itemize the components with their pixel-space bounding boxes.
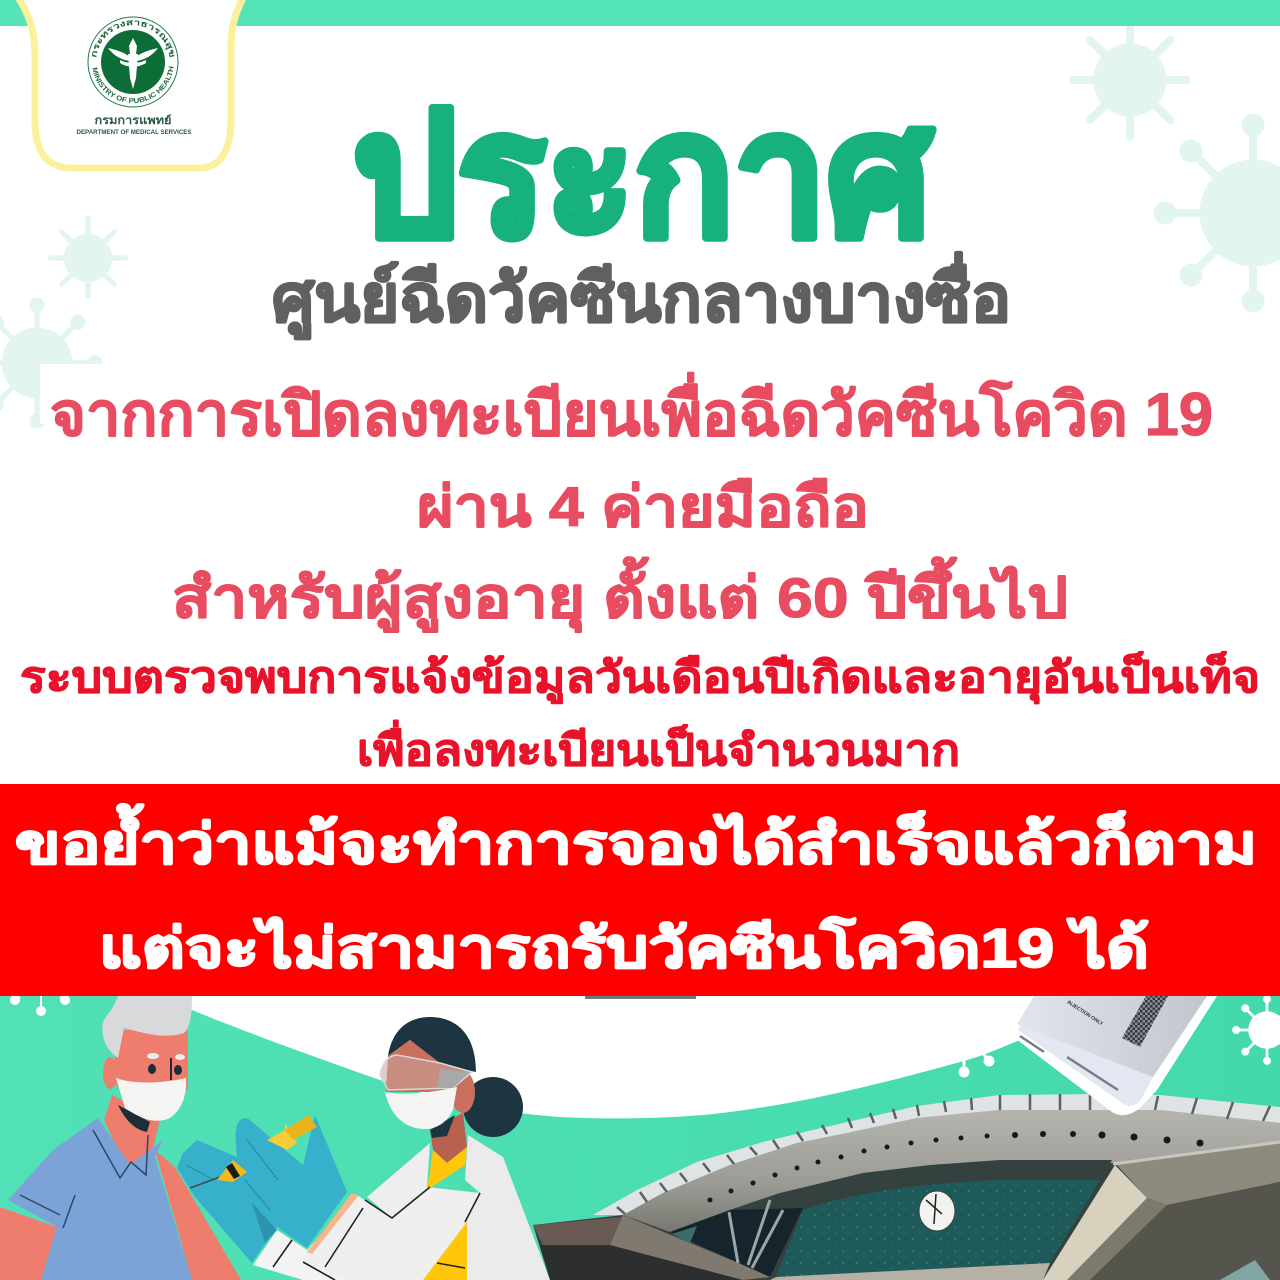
right inner dark wall xyxy=(1090,1182,1280,1280)
skylight dividers xyxy=(617,1094,1270,1214)
neck xyxy=(104,1095,160,1165)
seal ring text bottom: MINISTRY OF PUBLIC HEALTH xyxy=(92,66,174,103)
vial QR code xyxy=(1122,996,1168,1047)
dark struts xyxy=(670,1208,803,1277)
icon: white virus spokes left xyxy=(11,996,69,1015)
icon: faint virus clipped left xyxy=(0,298,102,428)
glove xyxy=(177,1115,347,1263)
syringe xyxy=(190,1115,317,1188)
left block brown xyxy=(533,1217,623,1245)
lower yellow shirt xyxy=(423,1222,467,1280)
text line 2: ผ่าน 4 ค่ายมือถือ xyxy=(417,475,869,538)
vaccine vial xyxy=(1015,996,1217,1115)
red banner xyxy=(0,784,1280,996)
bun xyxy=(463,1077,523,1137)
icon: white virus right xyxy=(1232,995,1280,1065)
coat sleeve xyxy=(305,1187,480,1280)
icon: caduceus xyxy=(108,38,158,89)
title: ประกาศ xyxy=(353,80,934,272)
neck xyxy=(430,1113,467,1163)
mask xyxy=(385,1087,457,1129)
character: nurse xyxy=(177,1017,550,1280)
icon: faint virus right xyxy=(1154,114,1280,312)
top green band xyxy=(0,0,1280,26)
diagonal beam xyxy=(610,1215,772,1280)
fascia holes xyxy=(708,1131,1204,1202)
logo panel xyxy=(17,0,244,168)
arm left xyxy=(0,1207,57,1280)
goggles xyxy=(380,1055,472,1090)
photo: bang sue station xyxy=(533,1094,1280,1280)
beige panel xyxy=(1043,1165,1147,1280)
hair xyxy=(102,996,192,1058)
bottom illustration xyxy=(0,995,1280,1280)
logo: ministry seal xyxy=(88,16,178,108)
banner line 2: แต่จะไม่สามารถรับวัคซีนโควิด19 ได้ xyxy=(99,916,1149,979)
dark soffit band xyxy=(730,1160,1112,1225)
yellow shirt xyxy=(427,1147,467,1190)
face xyxy=(112,1030,188,1095)
right ledge wall xyxy=(1115,1142,1280,1205)
character: elderly man xyxy=(0,996,241,1280)
bottom right glass xyxy=(1220,1260,1270,1280)
hair cap xyxy=(388,1017,476,1072)
building base xyxy=(533,1123,1280,1280)
shirt xyxy=(8,1118,192,1280)
vial label text: INJECTION ONLY xyxy=(1066,1000,1105,1028)
eyes xyxy=(148,1058,182,1080)
teal glass window xyxy=(776,1180,1100,1277)
text line 3: สำหรับผู้สูงอายุ ตั้งแต่ 60 ปีขึ้นไป xyxy=(172,557,1068,633)
text line 1: จากการเปิดลงทะเบียนเพื่อฉีดวัคซีนโควิด 19 xyxy=(50,372,1213,448)
text line 5: เพื่อลงทะเบียนเป็นจำนวนมาก xyxy=(357,720,960,775)
coat right xyxy=(420,1135,550,1280)
white curved swoosh xyxy=(160,996,1060,1118)
mask xyxy=(116,1078,186,1121)
arm right xyxy=(155,1150,241,1280)
banner line 1: ขอย้ำว่าแม้จะทำการจองได้สำเร็จแล้วก็ตาม xyxy=(15,804,1257,875)
roof skylight band xyxy=(593,1094,1280,1215)
icon: clock xyxy=(919,1191,955,1231)
icon: faint virus top right xyxy=(1073,20,1187,137)
icon: faint virus left xyxy=(50,218,126,296)
lower sleeve end xyxy=(253,1230,345,1280)
icon: white virus spokes xyxy=(960,1052,993,1076)
ear xyxy=(451,1071,475,1113)
subtitle: ศูนย์ฉีดวัคซีนกลางบางซื่อ xyxy=(272,251,1011,340)
logo: department name Thai: กรมการแพทย์ xyxy=(94,114,172,127)
text line 4: ระบบตรวจพบการแจ้งข้อมูลวันเดือนปีเกิดและอายุอันเป็นเท็จ xyxy=(20,651,1260,705)
silver roof fascia xyxy=(623,1110,1280,1232)
green background xyxy=(0,996,1280,1280)
left block dark xyxy=(540,1245,743,1280)
coat lapel xyxy=(367,1143,430,1218)
text fragment below banner xyxy=(585,996,696,999)
logo: department name English: DEPARTMENT OF MEDICAL SERVICES xyxy=(76,130,192,136)
cuff peach xyxy=(307,1193,358,1254)
face xyxy=(386,1040,470,1092)
light strip xyxy=(770,1263,1050,1280)
seal ring text top: กระทรวงสาธารณสุข xyxy=(92,20,174,58)
